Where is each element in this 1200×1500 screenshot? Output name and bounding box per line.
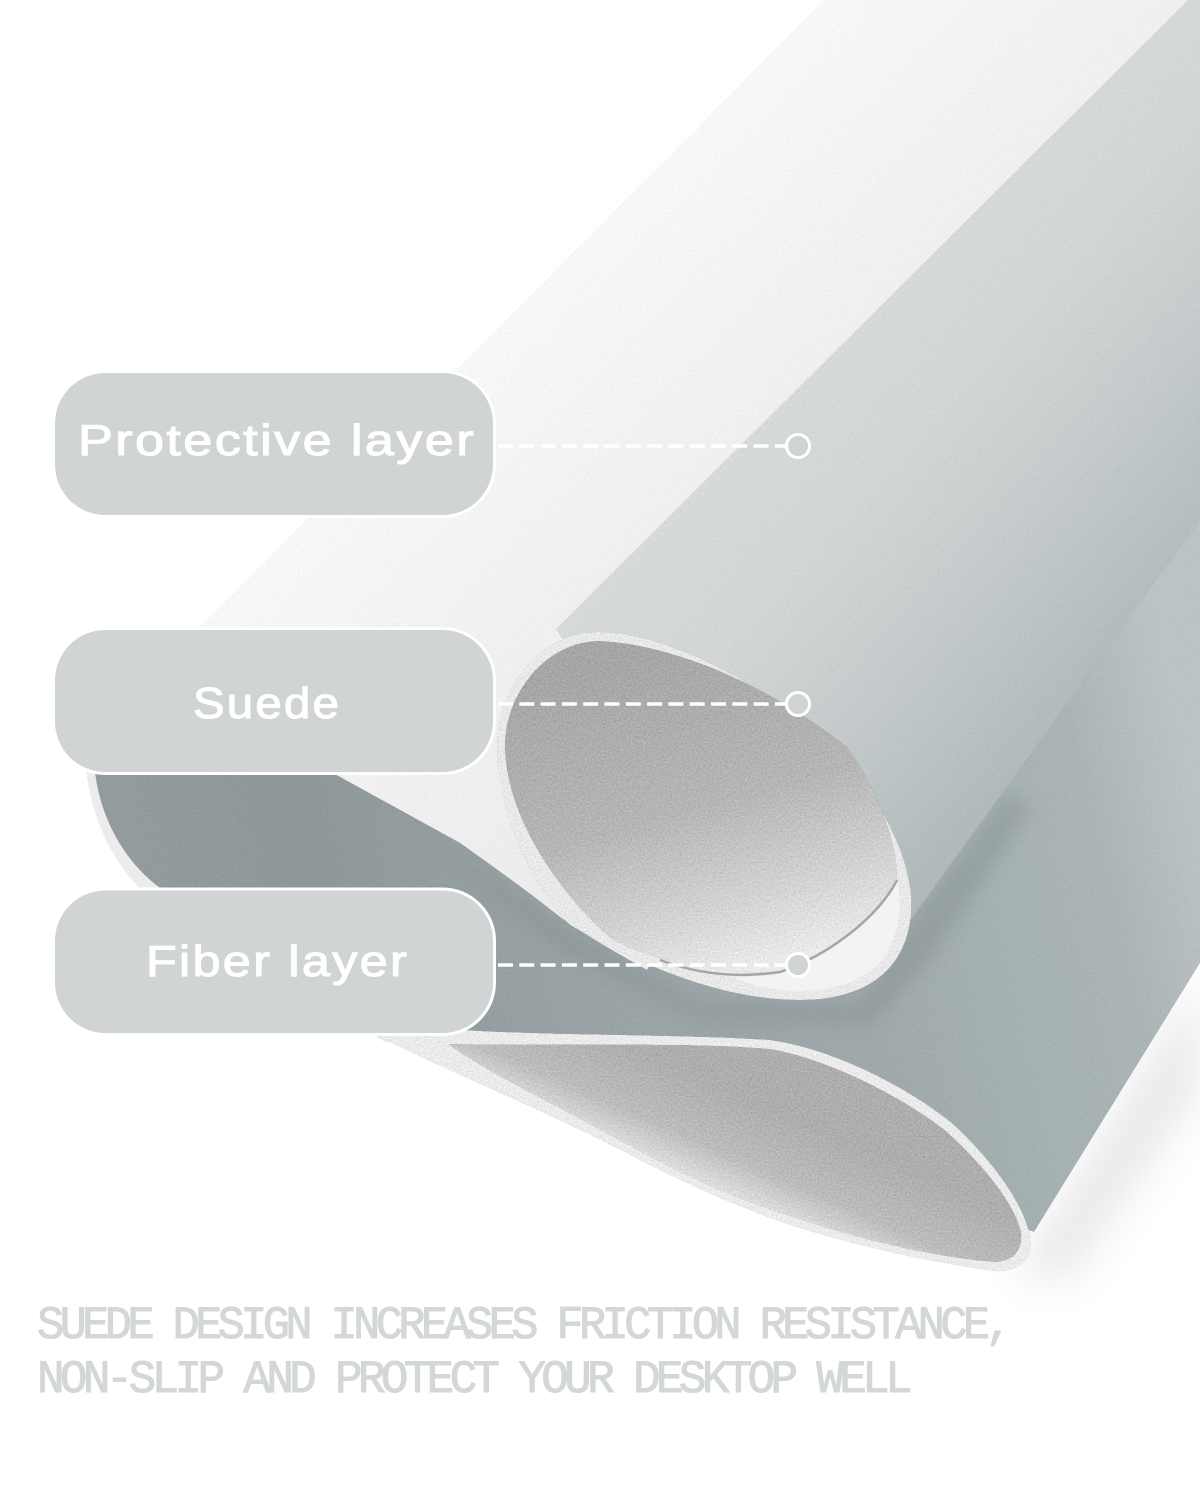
label text: Fiber layer [146, 937, 409, 986]
label text: Suede [193, 679, 341, 728]
lower suede fold: rim [378, 1030, 1031, 1271]
lower sheet: grey leather surface [95, 505, 1200, 1232]
lower sheet: left wing rim [86, 768, 500, 1042]
caption [37, 1300, 1008, 1406]
callout: suede [54, 628, 810, 774]
pill label [54, 628, 494, 774]
roll opening: inner crescent [735, 880, 899, 991]
dashed leader [498, 702, 786, 706]
pill label [54, 372, 494, 516]
label text: Protective layer [78, 416, 476, 465]
callout: protective layer [54, 372, 810, 516]
dashed leader [498, 444, 786, 448]
illustration: rolled desk mat [86, 0, 1200, 1280]
marker dot [786, 954, 810, 976]
shadow cast by the roll [340, 780, 1030, 1025]
roll opening: outer rim [497, 632, 911, 1000]
roll opening: inner suede nap [505, 641, 897, 972]
callout: fiber layer [54, 889, 810, 1034]
caption line 2: NON-SLIP AND PROTECT YOUR DESKTOP WELL [37, 1354, 910, 1406]
pill label [54, 889, 494, 1034]
grey leather tube of upper sheet [556, 0, 1200, 925]
lower suede fold: inner nap [448, 1044, 1021, 1262]
ground shadow [1015, 975, 1200, 1280]
white suede band of upper sheet [200, 0, 1190, 970]
marker dot [786, 692, 810, 716]
dashed leader [498, 963, 786, 967]
caption line 1: SUEDE DESIGN INCREASES FRICTION RESISTANCE, [37, 1300, 1008, 1352]
roll opening: cut edge line [660, 880, 897, 975]
marker dot [786, 434, 810, 458]
